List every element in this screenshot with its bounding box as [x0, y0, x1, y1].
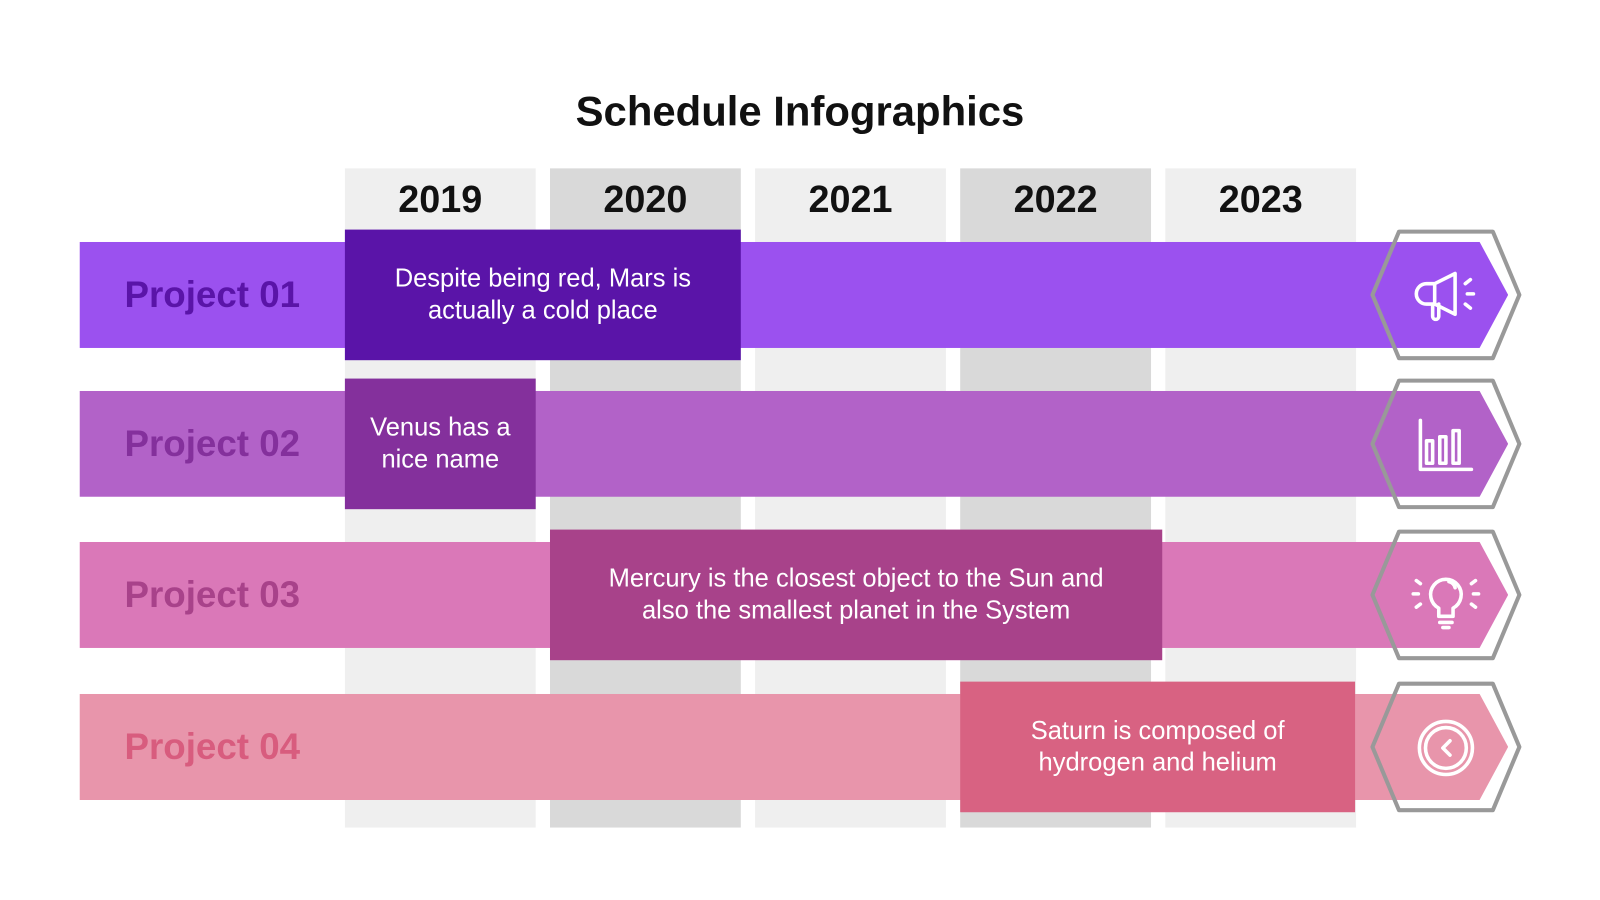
- box: project 02: [345, 379, 536, 509]
- year headers: [398, 179, 1303, 220]
- label: project 02: Project 02: [124, 422, 300, 464]
- label: project 04: Project 04: [124, 726, 300, 767]
- box: project 04: [960, 682, 1355, 812]
- box: project 02: nice name: [381, 445, 499, 473]
- box: project 03: [550, 530, 1162, 660]
- year headers: 2019: [398, 179, 482, 220]
- box: project 01: Despite being red, Mars is: [395, 264, 691, 293]
- year headers: 2021: [809, 179, 892, 220]
- hex 2 chart: [1372, 381, 1519, 507]
- label: project 01: Project 01: [124, 273, 300, 315]
- box: project 01: actually a cold place: [428, 296, 658, 324]
- year headers: 2022: [1014, 179, 1098, 220]
- label: project 03: Project 03: [124, 573, 300, 615]
- hex 1 megaphone: [1372, 232, 1519, 358]
- bar: project 01: [80, 242, 1508, 348]
- box: project 01: [345, 230, 741, 360]
- box: project 04: hydrogen and helium: [1039, 748, 1277, 777]
- bar: project 04: [80, 694, 1508, 800]
- bar: project 02: [80, 391, 1508, 497]
- box: project 03: also the smallest planet in the System: [642, 596, 1070, 624]
- hex 3 bulb: [1372, 532, 1519, 658]
- box: project 04: Saturn is composed of: [1031, 716, 1285, 745]
- box: project 02: Venus has a: [370, 413, 511, 442]
- year headers: 2020: [603, 179, 687, 220]
- hex 4 clock: [1372, 684, 1519, 810]
- box: project 03: Mercury is the closest object to the Sun and: [609, 564, 1104, 593]
- year headers: 2023: [1219, 179, 1303, 220]
- bar: project 03: [80, 542, 1508, 648]
- title: Schedule Infographics: [576, 88, 1024, 135]
